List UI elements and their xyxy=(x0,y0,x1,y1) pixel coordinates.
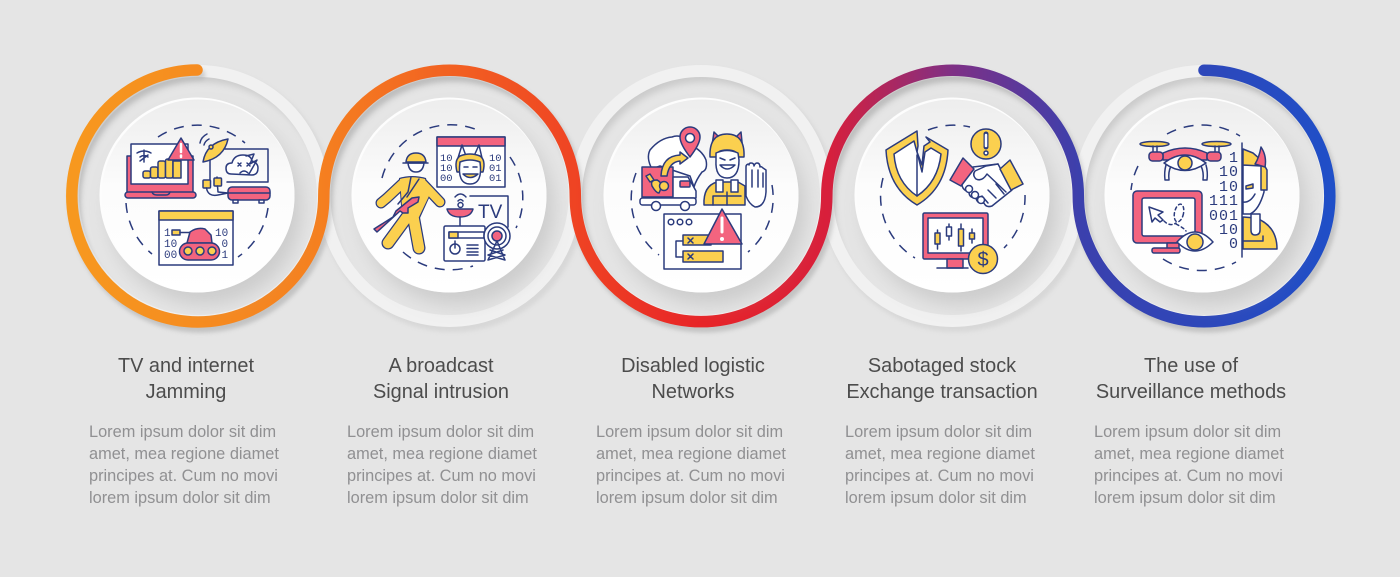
text block: Lorem ipsum dolor sit dim xyxy=(89,423,276,441)
icon: jamming: 10 xyxy=(164,239,177,251)
icon: surveillance: 1 xyxy=(1229,150,1239,167)
icon: jamming: 0 xyxy=(222,239,228,251)
icon: surveillance: 10 xyxy=(1219,222,1239,239)
icon: surveillance xyxy=(1131,125,1277,271)
text block: Lorem ipsum dolor sit dim xyxy=(845,423,1032,441)
icon: surveillance: 0 xyxy=(1229,236,1239,253)
gradient ribbon connecting all five steps xyxy=(72,70,1330,322)
icon: broadcast intrusion: 10 xyxy=(440,153,453,165)
text block: Lorem ipsum dolor sit dim xyxy=(347,423,534,441)
icon: jamming xyxy=(125,125,270,265)
panel: step 5 surveillance methods xyxy=(1094,125,1286,507)
text block: principes at. Cum no movi xyxy=(89,467,278,485)
icon: surveillance: 001 xyxy=(1209,208,1239,225)
icon: jamming: 00 xyxy=(164,250,177,262)
icon: jamming: 1 xyxy=(222,250,228,262)
heading: Signal intrusion xyxy=(373,381,509,403)
icon: jamming: 1 xyxy=(164,228,171,240)
icon: broadcast intrusion: 01 xyxy=(489,163,502,175)
text block: lorem ipsum dolor sit dim xyxy=(1094,489,1276,507)
heading: Exchange transaction xyxy=(846,381,1038,403)
icon: broadcast intrusion: 10 xyxy=(440,163,453,175)
heading: Jamming xyxy=(146,381,226,403)
panel: step 2 broadcast signal intrusion xyxy=(347,125,537,507)
icon: disabled logistics xyxy=(631,127,773,269)
text block: principes at. Cum no movi xyxy=(596,467,785,485)
heading: A broadcast xyxy=(388,355,494,377)
heading: The use of xyxy=(1144,355,1238,377)
panel: step 1 TV and internet jamming xyxy=(89,125,279,507)
text block: principes at. Cum no movi xyxy=(845,467,1034,485)
icon: sabotaged stock exchange xyxy=(881,125,1025,274)
text block: Lorem ipsum dolor sit dim xyxy=(1094,423,1281,441)
icon: surveillance: 10 xyxy=(1219,179,1239,196)
infographic canvas xyxy=(66,64,1340,506)
text block: amet, mea regione diamet xyxy=(596,445,786,463)
ring bases behind the ribbon xyxy=(69,68,1339,332)
text block: principes at. Cum no movi xyxy=(1094,467,1283,485)
text block: lorem ipsum dolor sit dim xyxy=(89,489,271,507)
text block: Lorem ipsum dolor sit dim xyxy=(596,423,783,441)
heading: TV and internet xyxy=(118,355,254,377)
icon: broadcast intrusion: TV xyxy=(478,202,503,223)
heading: Surveillance methods xyxy=(1096,381,1286,403)
icon: broadcast intrusion: 10 xyxy=(489,153,502,165)
icon: surveillance: 111 xyxy=(1209,193,1239,210)
text block: amet, mea regione diamet xyxy=(845,445,1035,463)
text block: lorem ipsum dolor sit dim xyxy=(845,489,1027,507)
white discs xyxy=(100,98,1307,305)
text block: principes at. Cum no movi xyxy=(347,467,536,485)
text block: lorem ipsum dolor sit dim xyxy=(347,489,529,507)
icon: broadcast intrusion: 01 xyxy=(489,173,502,185)
text block: amet, mea regione diamet xyxy=(1094,445,1284,463)
heading: Disabled logistic xyxy=(621,355,765,377)
panel: step 4 sabotaged stock exchange xyxy=(845,125,1038,507)
text block: lorem ipsum dolor sit dim xyxy=(596,489,778,507)
panel: step 3 disabled logistic networks xyxy=(596,127,786,507)
text block: amet, mea regione diamet xyxy=(347,445,537,463)
ribbon shadow xyxy=(75,75,1333,327)
icon: broadcast intrusion xyxy=(374,125,523,270)
icon: broadcast intrusion: 00 xyxy=(440,173,453,185)
icon: surveillance: 10 xyxy=(1219,164,1239,181)
icon: jamming: 10 xyxy=(215,228,228,240)
icon: sabotaged stock exchange: $ xyxy=(977,249,989,271)
heading: Networks xyxy=(652,381,734,403)
text block: amet, mea regione diamet xyxy=(89,445,279,463)
heading: Sabotaged stock xyxy=(868,355,1016,377)
